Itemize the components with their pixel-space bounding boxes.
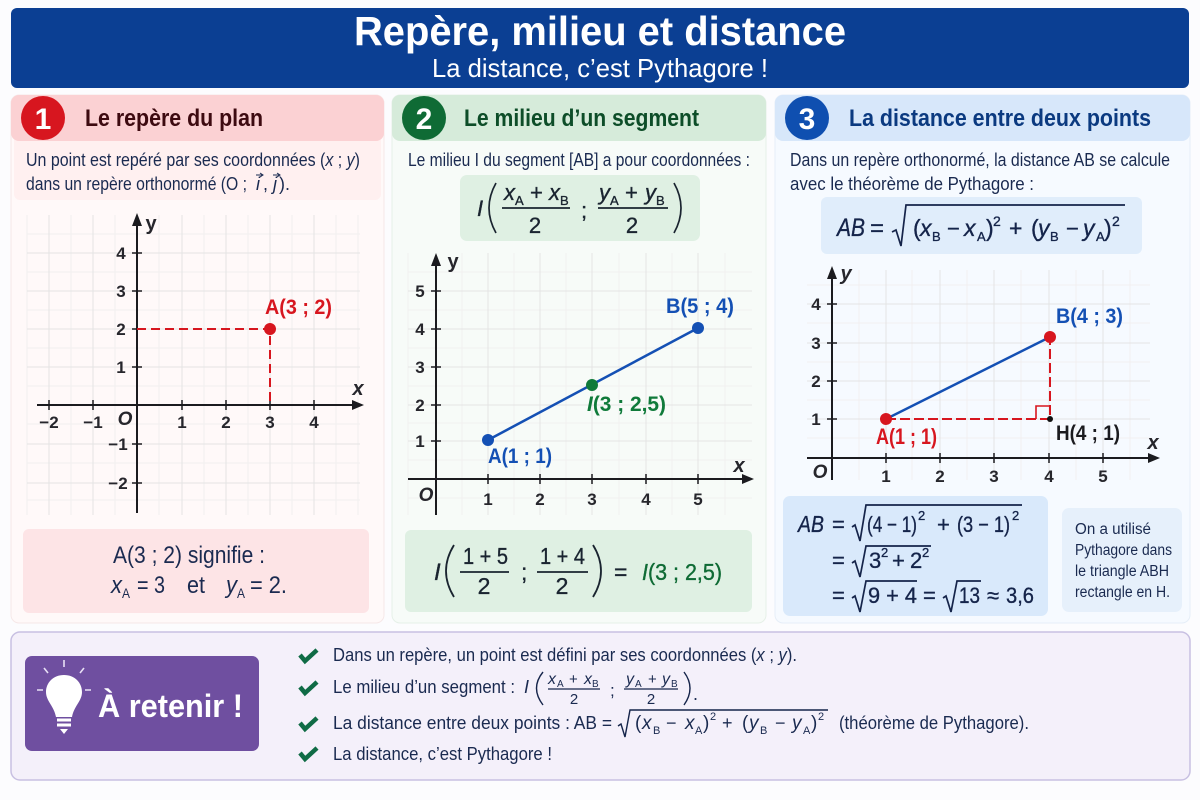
distance formula: B: [932, 229, 941, 244]
chart: distance AB with right triangle: 5: [1098, 467, 1108, 486]
panel 3 heading: 3: [799, 103, 815, 136]
chart: distance AB with right triangle: 2: [811, 372, 821, 391]
chart: distance AB with right triangle: 1: [881, 467, 891, 486]
point 3: distance formula: B: [653, 725, 660, 737]
point 3: distance formula: A: [695, 725, 703, 737]
distance calculation box: (3 − 1): [957, 512, 1010, 537]
panel 1 intro text: j: [270, 174, 278, 194]
distance formula: (: [1031, 215, 1039, 241]
point 3: distance formula: y: [790, 713, 803, 734]
chart: distance AB with right triangle: 1: [811, 410, 821, 429]
panel 3 intro text: [790, 150, 1170, 194]
panel 1: le repère du plan: [11, 95, 384, 623]
distance calculation box: =: [923, 583, 936, 608]
key points list: [300, 645, 1029, 764]
midpoint formula: A: [610, 193, 619, 208]
badge à retenir: [25, 656, 259, 751]
check 4: [300, 748, 317, 759]
point 2: midpoint formula: 2: [570, 691, 578, 708]
distance calculation box: 3: [869, 548, 881, 573]
panel 1 conclusion box: et: [187, 572, 205, 599]
subtitle: La distance, c’est Pythagore !: [432, 53, 768, 83]
distance calculation box: 9 + 4: [868, 583, 917, 608]
distance calculation box: 2: [918, 508, 925, 523]
note: Pythagore in triangle ABH: rectangle en H.: [1075, 584, 1170, 601]
point 2: midpoint formula: y: [661, 671, 671, 688]
panel 1 conclusion box: A(3 ; 2) signifie :: [113, 542, 265, 569]
distance calculation box: =: [832, 583, 845, 608]
chart: midpoint of AB: 5: [693, 490, 703, 509]
distance formula: −: [947, 216, 960, 241]
distance calculation box: 2: [922, 545, 929, 560]
point 2: midpoint formula: B: [592, 679, 599, 690]
point 3: distance formula: (: [635, 713, 642, 734]
chart: midpoint of AB: 3: [415, 358, 425, 377]
chart: point A in the plane: y: [145, 213, 157, 235]
point 3: distance formula: y: [747, 713, 760, 734]
midpoint calculation box: I: [434, 559, 441, 586]
panel 1 intro text: ).: [279, 174, 290, 194]
chart: distance AB with right triangle: y: [839, 263, 852, 285]
distance formula: 2: [1112, 213, 1120, 229]
panel 1 conclusion box: x: [110, 572, 123, 599]
point 2: midpoint formula: x: [547, 671, 557, 688]
chart: point A in the plane: x: [351, 378, 364, 400]
distance calculation box: 2: [910, 548, 922, 573]
chart: distance AB with right triangle: 2: [935, 467, 945, 486]
distance calculation box: AB: [796, 511, 824, 537]
distance calculation box: ≈: [987, 583, 999, 608]
panel 1 conclusion box: y: [224, 572, 239, 599]
chart: midpoint of AB: O: [419, 485, 434, 506]
point 2: midpoint formula: B: [671, 679, 678, 690]
panel 1 heading: 1: [35, 103, 51, 136]
chart: midpoint of AB: A(1 ; 1): [488, 445, 552, 468]
panel 1 intro text: Un point est repéré par ses coordonnées (x ; y): [26, 150, 360, 170]
chart: point A in the plane: −2: [108, 474, 128, 493]
chart: point A in the plane: O: [118, 409, 133, 430]
point 3: distance formula: −: [775, 713, 786, 733]
header banner: [11, 8, 1189, 88]
midpoint calculation box: 1 + 5: [463, 543, 508, 569]
panel 1 intro text: [14, 135, 381, 200]
panel 2 heading: 2: [416, 103, 432, 136]
panel 2: le milieu d'un segment: [392, 95, 766, 623]
check 3: [300, 718, 317, 729]
chart: midpoint of AB: y: [447, 251, 459, 273]
distance formula: x: [919, 215, 933, 241]
distance formula: x: [963, 215, 977, 241]
panel 1 heading: Le repère du plan: [85, 105, 263, 132]
distance formula: y: [1036, 215, 1051, 241]
point 2: midpoint formula: .: [693, 684, 698, 704]
distance formula: y: [1081, 215, 1096, 241]
point 2: midpoint formula: +: [648, 671, 657, 688]
midpoint calculation box: 2: [556, 573, 568, 599]
point 3: distance formula: 2: [818, 711, 824, 723]
distance formula: [821, 197, 1142, 254]
point 3: distance formula: La distance entre deux points : AB =: [333, 713, 612, 733]
midpoint formula: +: [625, 180, 638, 205]
panel 1 intro text: i: [256, 174, 261, 194]
point 2: midpoint formula: A: [635, 679, 642, 690]
distance calculation box: 13: [959, 583, 980, 608]
title: Repère, milieu et distance: [354, 8, 846, 54]
point 3: distance formula: (: [742, 713, 749, 734]
point 2: midpoint formula: I: [524, 677, 529, 697]
chart: midpoint of AB: 4: [641, 490, 651, 509]
point 4 text: La distance, c’est Pythagore !: [333, 744, 552, 764]
note: Pythagore in triangle ABH: Pythagore dans: [1075, 542, 1172, 559]
panel 2 heading: [392, 95, 766, 141]
distance calculation box: =: [832, 548, 845, 573]
chart: midpoint of AB: x: [732, 455, 745, 477]
point 3: distance formula: ): [811, 713, 817, 734]
chart: distance AB with right triangle: O: [813, 462, 828, 483]
midpoint calculation box: 2: [478, 573, 490, 599]
chart: midpoint of AB: 3: [587, 490, 597, 509]
chart: midpoint of AB: 1: [415, 432, 425, 451]
distance calculation box: =: [832, 512, 845, 537]
midpoint formula: ;: [581, 198, 587, 223]
midpoint formula: x: [503, 180, 516, 205]
panel 1 conclusion box: A: [237, 585, 246, 601]
point 2: midpoint formula: Le milieu d’un segment :: [333, 677, 515, 697]
chart: midpoint of AB: B(5 ; 4): [666, 295, 734, 318]
distance calculation box: +: [937, 512, 950, 537]
distance formula: =: [870, 215, 884, 242]
chart: midpoint of AB: I(3 ; 2,5): [587, 393, 666, 416]
chart: point A in the plane: 3: [116, 282, 126, 301]
chart: point A in the plane: 2: [116, 320, 126, 339]
note: Pythagore in triangle ABH: [1062, 508, 1182, 612]
midpoint formula: I: [477, 196, 483, 221]
panel 1 conclusion box: [23, 529, 369, 613]
distance formula: B: [1050, 229, 1059, 244]
chart: distance AB with right triangle: [807, 263, 1160, 486]
chart: distance AB with right triangle: 3: [811, 334, 821, 353]
midpoint calculation box: [405, 530, 752, 612]
distance calculation box: 3,6: [1006, 583, 1034, 608]
point 2: midpoint formula: [333, 671, 698, 708]
distance calculation box: (4 − 1): [867, 512, 917, 537]
distance formula: A: [1096, 229, 1105, 244]
chart: point A in the plane: [27, 213, 364, 515]
midpoint calculation box: ;: [521, 559, 527, 585]
chart: midpoint of AB: [408, 251, 754, 515]
chart: midpoint of AB: 4: [415, 320, 425, 339]
panel 3 heading: La distance entre deux points: [849, 105, 1151, 132]
chart: point A in the plane: 3: [265, 413, 275, 432]
panel 1 conclusion box: A: [122, 585, 131, 601]
chart: distance AB with right triangle: H(4 ; 1): [1056, 422, 1120, 445]
panel 3 intro text: avec le théorème de Pythagore :: [790, 174, 1034, 194]
chart: point A in the plane: −2: [39, 413, 59, 432]
panel 1 intro text: dans un repère orthonormé (O ;: [26, 174, 247, 194]
point 2: midpoint formula: ;: [610, 681, 615, 700]
distance formula: A: [977, 229, 986, 244]
chart: point A in the plane: 4: [116, 244, 126, 263]
point 3: distance formula: +: [722, 713, 733, 733]
chart: midpoint of AB: 5: [415, 282, 425, 301]
point 1 text: Dans un repère, un point est défini par ses coordonnées (x ; y).: [333, 645, 797, 665]
distance formula: 2: [993, 213, 1001, 229]
chart: point A in the plane: 4: [309, 413, 319, 432]
note: Pythagore in triangle ABH: On a utilisé: [1075, 521, 1151, 538]
badge à retenir: À retenir !: [98, 688, 243, 724]
distance formula: +: [1009, 215, 1022, 241]
chart: point A in the plane: A(3 ; 2): [265, 296, 332, 319]
distance calculation box: 2: [1012, 508, 1019, 523]
point 3: distance formula: ): [703, 713, 709, 734]
point 3: distance formula: A: [803, 725, 811, 737]
distance calculation box: +: [892, 548, 905, 573]
midpoint calculation box: 1 + 4: [540, 543, 585, 569]
chart: point A in the plane: −1: [83, 413, 103, 432]
distance calculation box: 2: [881, 545, 888, 560]
distance formula: ): [1104, 215, 1112, 241]
chart: midpoint of AB: 2: [535, 490, 545, 509]
panel 1 conclusion box: = 2.: [250, 572, 287, 599]
midpoint formula: B: [656, 193, 665, 208]
point 3: distance formula: −: [666, 713, 677, 733]
chart: distance AB with right triangle: B(4 ; 3): [1056, 305, 1123, 328]
panel 2 intro text: Le milieu I du segment [AB] a pour coordonnées :: [408, 150, 750, 170]
panel 3 heading: [775, 95, 1190, 141]
chart: point A in the plane: 1: [116, 358, 126, 377]
point 3: distance formula: B: [760, 725, 767, 737]
midpoint formula: B: [560, 193, 569, 208]
icon: light bulb: [37, 660, 91, 734]
distance formula: (: [913, 215, 921, 241]
midpoint formula: y: [643, 180, 658, 205]
panel 1 intro text: ,: [263, 174, 268, 194]
midpoint formula: x: [548, 180, 561, 205]
distance formula: AB: [835, 214, 865, 242]
chart: midpoint of AB: 1: [483, 490, 493, 509]
midpoint formula: y: [597, 180, 612, 205]
chart: distance AB with right triangle: 3: [989, 467, 999, 486]
midpoint calculation box: =: [614, 559, 627, 585]
chart: point A in the plane: 1: [177, 413, 187, 432]
distance calculation box: [783, 496, 1048, 616]
midpoint formula: 2: [529, 213, 541, 238]
panel: à retenir: [11, 632, 1190, 780]
chart: point A in the plane: 2: [221, 413, 231, 432]
chart: distance AB with right triangle: 4: [811, 295, 821, 314]
point 3: distance formula: x: [684, 713, 696, 734]
point 2: midpoint formula: y: [625, 671, 635, 688]
chart: distance AB with right triangle: x: [1146, 432, 1159, 454]
point 2: midpoint formula: 2: [647, 691, 655, 708]
point 3: distance formula: 2: [710, 711, 716, 723]
midpoint calculation box: I(3 ; 2,5): [642, 559, 722, 585]
point 3: distance formula: [333, 710, 1029, 737]
midpoint formula: [460, 175, 700, 241]
note: Pythagore in triangle ABH: le triangle ABH: [1075, 563, 1169, 580]
chart: point A in the plane: −1: [108, 435, 128, 454]
chart: distance AB with right triangle: A(1 ; 1): [876, 424, 937, 449]
panel 2 heading: Le milieu d’un segment: [464, 105, 699, 132]
point 2: midpoint formula: x: [583, 671, 593, 688]
check 2: [300, 682, 317, 693]
chart: distance AB with right triangle: 4: [1044, 467, 1054, 486]
point 2: midpoint formula: +: [569, 671, 578, 688]
midpoint formula: +: [530, 180, 543, 205]
chart: midpoint of AB: 2: [415, 396, 425, 415]
panel 3: la distance entre deux points: [775, 95, 1190, 623]
midpoint formula: 2: [626, 213, 638, 238]
panel 1 conclusion box: = 3: [137, 572, 165, 599]
point 2: midpoint formula: A: [557, 679, 564, 690]
panel 1 heading: [11, 95, 384, 141]
distance formula: −: [1066, 216, 1079, 241]
distance formula: ): [986, 215, 994, 241]
check 1: [300, 650, 317, 661]
point 3: distance formula: x: [641, 713, 653, 734]
point 3: distance formula: (théorème de Pythagore).: [839, 713, 1029, 733]
midpoint formula: A: [515, 193, 524, 208]
